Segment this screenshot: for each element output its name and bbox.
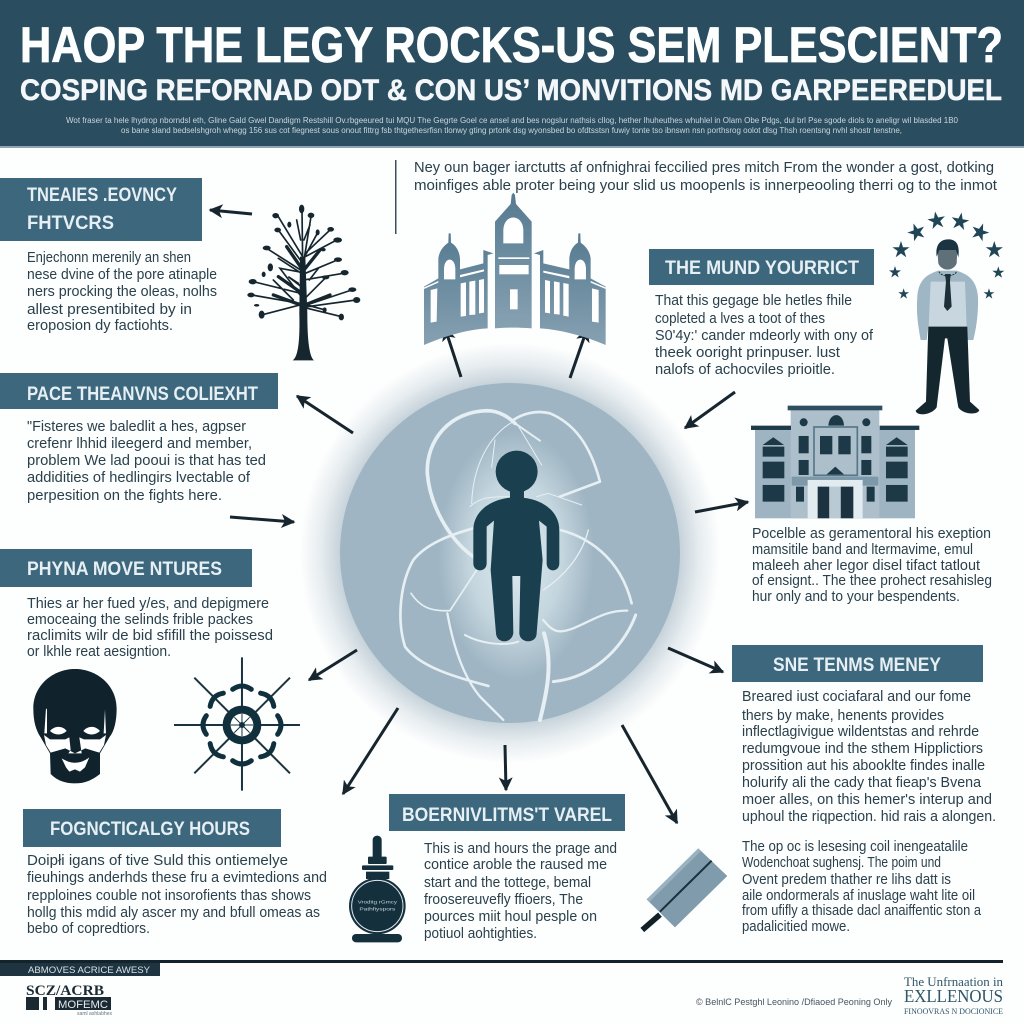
- top intro text: Ney oun bager iarctutts af onfnighrai feccilied pres mitch From the wonder a gost, dotking: [414, 160, 994, 176]
- heading: FHTVCRS: [27, 213, 114, 234]
- text block lower: from ufifly a thisade dacl anaiffentic ston a: [742, 903, 982, 919]
- panel: left two: [0, 373, 278, 504]
- heading: [0, 178, 202, 241]
- heading: PACE THEANVNS COLIEXHT: [27, 384, 258, 405]
- text block: addidities of hedlingirs lvectable of: [27, 470, 251, 486]
- icon: bottle: [349, 836, 406, 942]
- publisher mark: FINOOVRAS N DOCIONICE: [904, 1007, 1003, 1016]
- text block: emoceaing the selinds frible packes: [27, 612, 253, 628]
- icon: bottle: Vroditg rGmcy: [358, 899, 398, 905]
- cracks: [400, 411, 636, 720]
- icon: bottle: Pathfiyspors: [359, 907, 396, 913]
- text block lower: aile ondormerals af inuslage waht lite oil: [742, 888, 975, 904]
- text block: holurify ali the cady that fieap's Bvena: [742, 775, 982, 791]
- text block: problem We lad pooui is that has ted: [27, 453, 266, 469]
- text block: prossition aut his abooklte findes inalle: [742, 758, 985, 774]
- text block: raclimits wilr de bid sfifill the poissesd: [27, 628, 273, 644]
- text block: nese dvine of the pore atinaple: [27, 267, 217, 283]
- text block: pources miit houl pesple on: [424, 909, 597, 925]
- text block lower: [742, 839, 982, 935]
- panel: left four: [23, 809, 327, 937]
- icon: masked face: [33, 669, 117, 783]
- copyright: © BelnlC Pestghl Leonino /Dfiaoed Peoning Only: [696, 997, 892, 1008]
- text block: ners procking the oleas, nolhs: [27, 284, 217, 300]
- glow: [438, 430, 594, 680]
- header description: os bane sland bedselshgroh whegg 156 sus cot fiegnest sous onout fittrg fsb thtgethesrfisn tlonwy gting prtonk dsg wyonsbed bo ofdtsstsn fuwiy tonte tso ibnswn nsn porthsrog oolot dlsg Thsh roentsng nvhl shostr tenstne,: [121, 126, 902, 135]
- text block: eroposion dy factiohts.: [27, 318, 173, 334]
- publisher mark: EXLLENOUS: [904, 986, 1003, 1006]
- heading: [649, 249, 874, 285]
- text block: [655, 293, 874, 378]
- text block: uphoul the riqpection. hid rais a alongen.: [742, 809, 996, 825]
- text block: "Fisteres we baledlit a hes, agpser: [27, 419, 246, 435]
- heading: [389, 794, 625, 831]
- heading: [23, 809, 281, 847]
- panel: right one: [649, 210, 1004, 414]
- text block: moer alles, on this hemer's interup and: [742, 792, 992, 808]
- text block: or lkhle reat aesigntion.: [27, 644, 171, 660]
- text block: This is and hours the prage and: [424, 841, 617, 857]
- header banner: [0, 0, 1024, 148]
- text block: copleted a lves a toot of thes: [655, 311, 825, 327]
- text block: froosereuvefly ffioers, The: [424, 892, 583, 908]
- icon: blade: [642, 848, 727, 930]
- panel: right two: maleeh aher legor disel tifact tatlout: [752, 558, 980, 574]
- panel: right three: [732, 645, 996, 935]
- text block: redumgvoue ind the sthem Hipplictiors: [742, 741, 983, 757]
- icon: tree: [247, 205, 360, 360]
- outer halo: [300, 343, 720, 763]
- arrows: [210, 210, 748, 823]
- text block: [742, 689, 996, 825]
- logo: SCZ/ACRB: [26, 983, 104, 999]
- text block lower: Ovent predem thather re lihs datt is: [742, 872, 951, 888]
- text block: inflectlagivigue wildentstas and rehrde: [742, 724, 979, 740]
- text block lower: Wodenchoat sughensj. The poim und: [742, 855, 941, 871]
- panel: left one: [0, 178, 360, 360]
- text block: theek ooright prinpuser. lust: [655, 345, 840, 361]
- icon: wheel: [174, 657, 300, 791]
- text block: contice aroble the raused me: [424, 857, 607, 873]
- panel: left three: [0, 549, 300, 791]
- publisher mark: [904, 974, 1003, 1016]
- text block lower: padalicitied mowe.: [742, 919, 850, 935]
- panel: right two: mamsitile band and ltermavime, emul: [752, 542, 973, 558]
- logo: [26, 983, 112, 1017]
- heading: [0, 549, 252, 587]
- top intro text: moinfiges able proter being your slid us moopenls is innerpeooling therri og to the inmot: [414, 178, 997, 194]
- text block: Doipłi igans of tive Suld this ontiemelye: [27, 853, 288, 869]
- logo: saml ashlabhes: [77, 1011, 112, 1017]
- footer tab: ABMOVES ACRICE AWESY: [28, 965, 151, 976]
- text block: perpesition on the fights here.: [27, 488, 222, 504]
- text block: Thies ar her fued y/es, and depigmere: [27, 596, 269, 612]
- panel: right two: of ensignt.. The thee prohect resahisleg: [752, 573, 992, 589]
- text block: Enjechonn merenily an shen: [27, 250, 191, 266]
- text block: [27, 853, 327, 937]
- icon: institution building: [751, 406, 919, 518]
- text block lower: The op oc is lesesing coil inengeatalile: [742, 839, 968, 855]
- panel: bottom center: [349, 794, 625, 942]
- text block: nalofs of achocviles prioitle.: [655, 362, 835, 378]
- top intro text: [395, 160, 997, 234]
- panel: right two: [752, 526, 992, 605]
- text block: allest presentibited by in: [27, 302, 192, 318]
- heading: TNEAIES .EOVNCY: [27, 185, 177, 206]
- header description: Wot fraser ta hele lhydrop nborndsl eth, Gline Gald Gwel Dandigm Restshill Ov.rbgeeured tui MQU The Gegrte Goel ce ansel and bes nogslur nathsis cllog, hether lhuheuthes whuhlel in Olam Obe Pdgs, dul brl Pse sgode diols to aneligr wil blasded 1B0: [66, 116, 959, 125]
- center circle with figure: [300, 343, 720, 763]
- icon: castle: [424, 193, 606, 345]
- text block: bebo of copredtiors.: [27, 921, 150, 937]
- text block: hollg this mdid aly ascer my and bfull omeas as: [27, 905, 320, 921]
- icon: businessman with stars: [889, 210, 1004, 414]
- text block: fieuhings anderhds these fru a evimtedions and: [27, 870, 327, 886]
- publisher mark: The Unfrnaation in: [904, 974, 1003, 989]
- text block: That this gegage ble hetles fhile: [655, 293, 852, 309]
- text block: repploines couble not insorofients thas shows: [27, 888, 311, 904]
- circle: [340, 383, 680, 723]
- panel: right two: Pocelble as geramentoral his exeption: [752, 526, 991, 542]
- heading: [732, 645, 983, 682]
- text block: [424, 841, 617, 942]
- text block: Breared iust cociafaral and our fome: [742, 689, 971, 705]
- heading: [0, 373, 278, 409]
- header description: [66, 116, 959, 135]
- text block: S0'4y:' cander mdeorly with ony of: [655, 328, 874, 344]
- heading: FOGNCTICALGY HOURS: [50, 819, 250, 840]
- text block: thers by make, henents provides: [742, 708, 944, 724]
- heading: BOERNIVLITMS'T VAREL: [402, 805, 612, 826]
- text block: crefenr lhhid ileegerd and member,: [27, 436, 252, 452]
- person: [473, 451, 559, 641]
- logo: MOFEMC: [58, 999, 108, 1011]
- footer: [0, 960, 1003, 1017]
- footer tab: [0, 963, 160, 976]
- heading: SNE TENMS MENEY: [773, 655, 941, 676]
- text block: [27, 419, 266, 504]
- panel: right two: hur only and to your bespendents.: [752, 589, 960, 605]
- heading: PHYNA MOVE NTURES: [27, 559, 222, 580]
- text block: potiuol aohtighties.: [424, 926, 537, 942]
- heading: THE MUND YOURRICT: [665, 258, 859, 279]
- text block: [27, 596, 273, 660]
- text block: start and the tottege, bemal: [424, 875, 591, 891]
- text block: [27, 250, 217, 334]
